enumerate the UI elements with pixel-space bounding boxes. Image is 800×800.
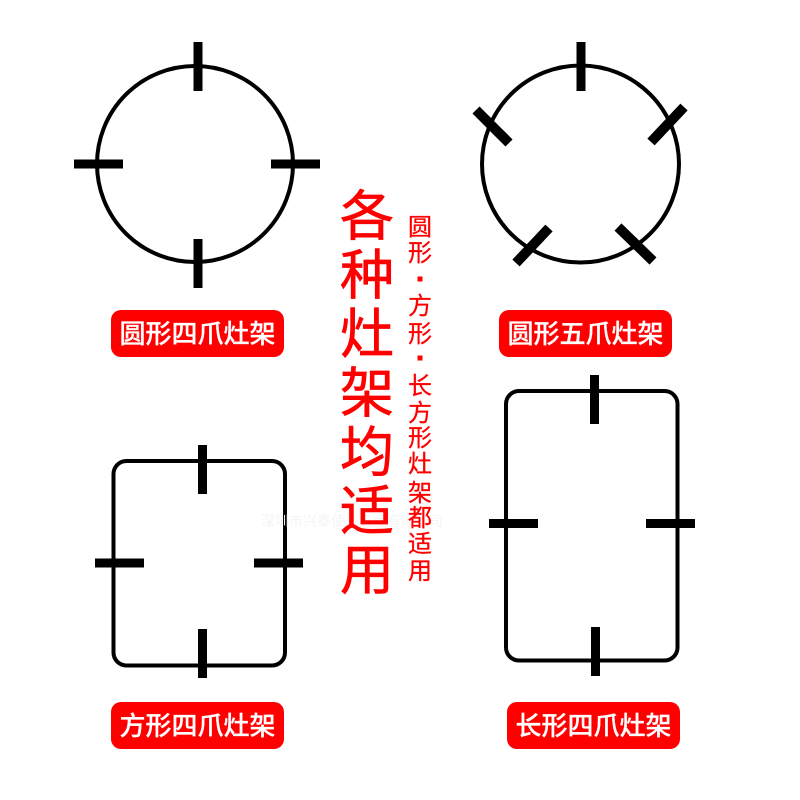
- text block: vertical subtitle: 方: [408, 400, 432, 427]
- label: square four claw: 方形四爪灶架: [119, 711, 276, 741]
- text block: vertical subtitle: 灶: [408, 451, 432, 478]
- label: round five claw: 圆形五爪灶架: [507, 319, 664, 349]
- watermark: 深圳市兴泰使人五金有限公司: [261, 513, 443, 529]
- heading: vertical main title: 适: [340, 482, 394, 542]
- diagram: round burner rack with five claws: [476, 42, 684, 263]
- diagram: round burner rack with four claws: [74, 42, 320, 288]
- text block: vertical subtitle: 形: [408, 321, 432, 348]
- heading: vertical main title: 灶: [340, 305, 394, 365]
- text block: vertical subtitle: [408, 214, 432, 585]
- text block: vertical subtitle: 都: [408, 505, 432, 532]
- diagram: rectangular burner rack with four claws: [489, 375, 695, 676]
- heading: vertical main title: 架: [340, 364, 394, 424]
- text block: vertical subtitle: 架: [408, 480, 432, 507]
- heading: vertical main title: 均: [340, 423, 394, 483]
- label: rectangular four claw: 长形四爪灶架: [515, 711, 672, 741]
- label: rectangular four claw: [507, 702, 680, 749]
- label: round four claw: 圆形四爪灶架: [119, 319, 276, 349]
- label: round five claw: [499, 310, 672, 357]
- text block: vertical subtitle: 长: [408, 373, 432, 400]
- text block: vertical subtitle: 用: [408, 558, 432, 585]
- text block: vertical subtitle: 形: [408, 240, 432, 267]
- diagram: square burner rack with four claws: [95, 445, 303, 678]
- heading: vertical main title: [340, 187, 394, 601]
- label: round four claw: [111, 310, 284, 357]
- heading: vertical main title: 种: [340, 246, 394, 306]
- text block: vertical subtitle: 形: [408, 425, 432, 452]
- text block: vertical subtitle: 圆: [408, 214, 432, 241]
- text block: vertical subtitle: 适: [408, 531, 432, 558]
- text block: vertical subtitle: 方: [408, 293, 432, 320]
- heading: vertical main title: 各: [340, 187, 394, 247]
- label: square four claw: [111, 702, 284, 749]
- heading: vertical main title: 用: [340, 541, 394, 601]
